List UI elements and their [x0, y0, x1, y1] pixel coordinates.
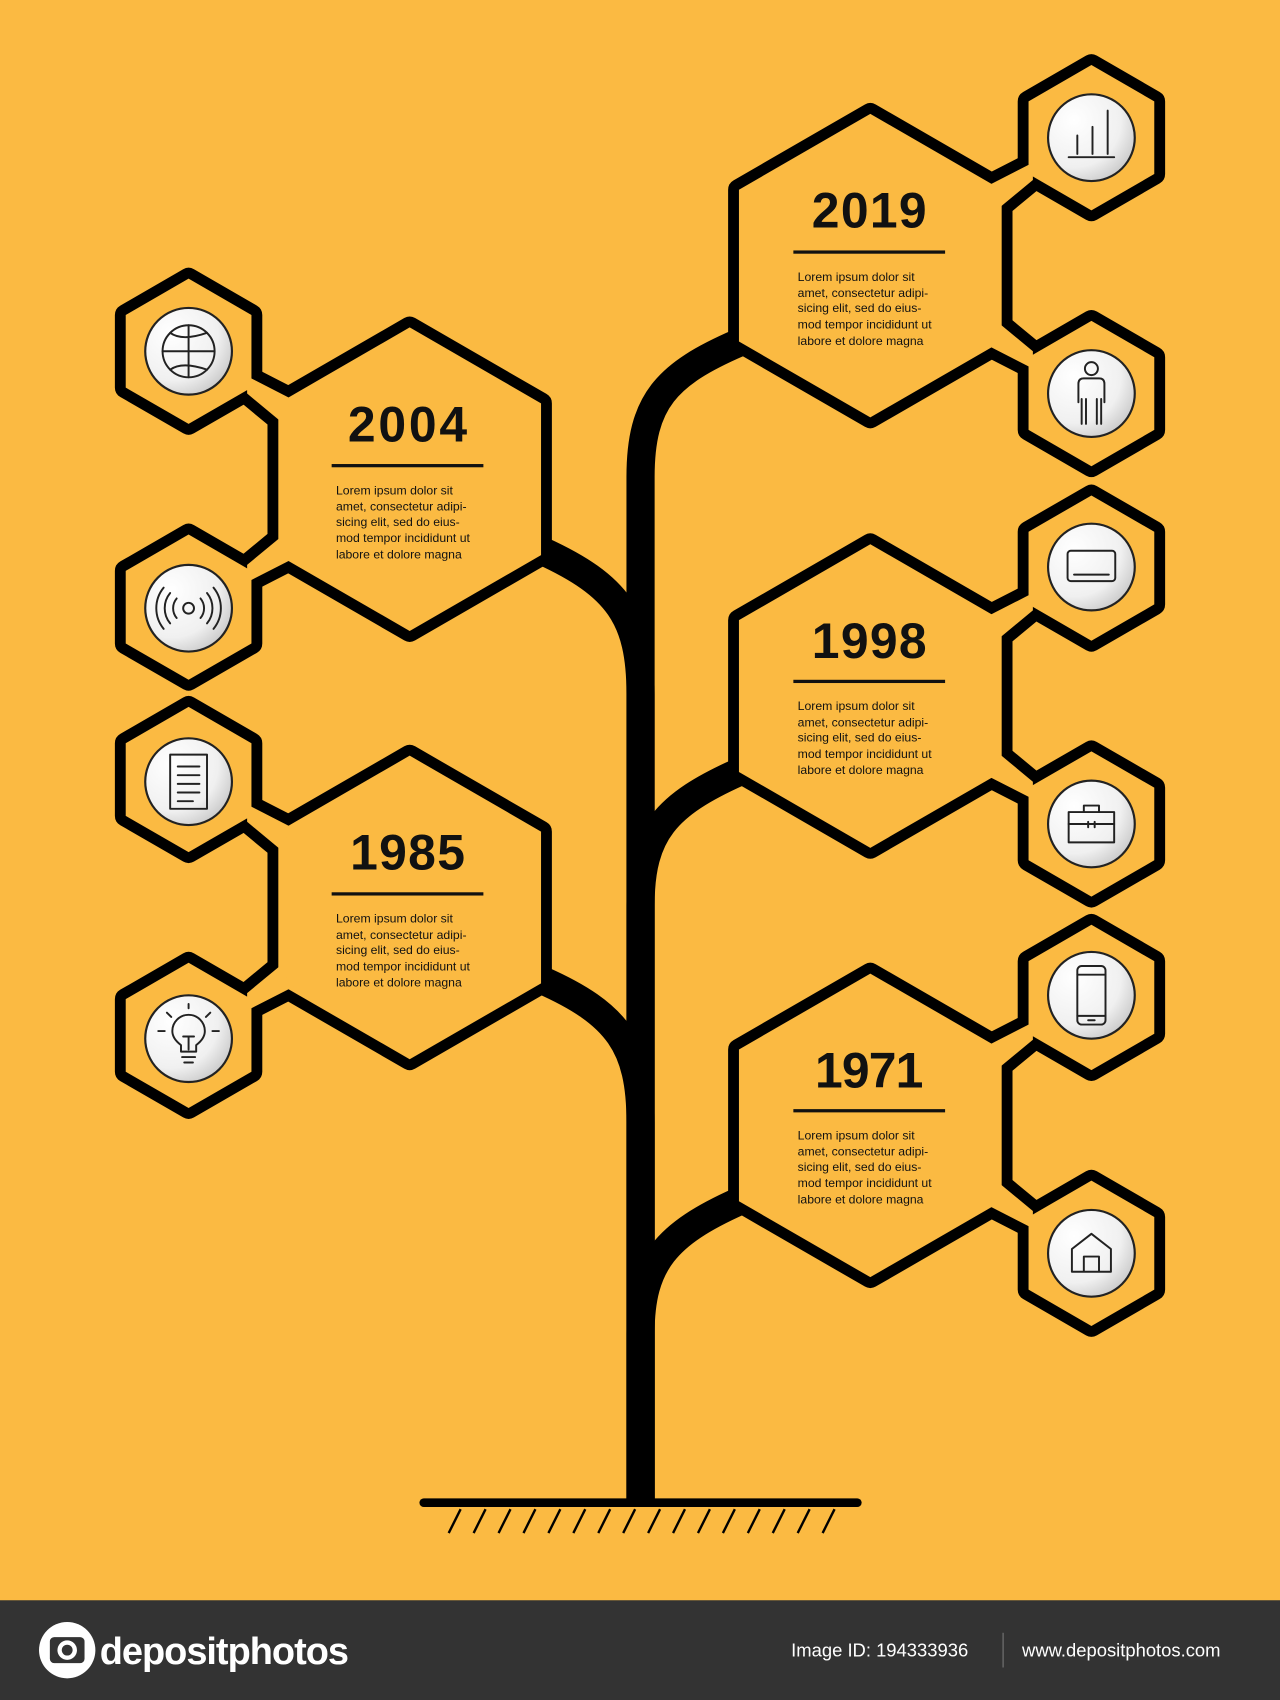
panel: 1971: 1971	[815, 1042, 923, 1098]
panel: 1985: 1985	[350, 825, 465, 881]
logo	[39, 1622, 349, 1678]
panel: 2019: sicing elit, sed do eius-	[798, 301, 921, 315]
image id: Image ID: 194333936	[791, 1640, 968, 1661]
panel: 1971: Lorem ipsum dolor sit	[798, 1128, 915, 1142]
panel: 1971: sicing elit, sed do eius-	[798, 1160, 921, 1174]
panel: 2004: Lorem ipsum dolor sit	[336, 483, 454, 497]
panel: 1985: Lorem ipsum dolor sit	[336, 912, 454, 926]
panel: 1985: labore et dolore magna	[336, 976, 462, 990]
panel: 1971: mod tempor incididunt ut	[798, 1176, 932, 1190]
panel: 2004: sicing elit, sed do eius-	[336, 515, 460, 529]
panel: 1971: labore et dolore magna	[798, 1192, 924, 1206]
panel: 2004: 2004	[348, 396, 467, 452]
panel: 2004: mod tempor incididunt ut	[336, 531, 471, 545]
panel: 2019: Lorem ipsum dolor sit	[798, 270, 915, 284]
icon: person	[1048, 350, 1135, 437]
panel: 1985: mod tempor incididunt ut	[336, 959, 471, 973]
panel: 1998: amet, consectetur adipi-	[798, 715, 928, 729]
icon: monitor	[1048, 524, 1135, 610]
footer bar	[0, 1600, 1280, 1700]
panel: 1998: labore et dolore magna	[798, 763, 924, 777]
panel: 1985	[332, 825, 483, 990]
panel: 1998: 1998	[812, 613, 927, 669]
panel: 1971: amet, consectetur adipi-	[798, 1145, 928, 1159]
panel: 1985: amet, consectetur adipi-	[336, 928, 467, 942]
icon: document	[145, 738, 232, 825]
icon: phone	[1048, 952, 1135, 1039]
panel: 1998: Lorem ipsum dolor sit	[798, 699, 915, 713]
panel: 2019: labore et dolore magna	[798, 334, 924, 348]
panel: 2004	[332, 396, 483, 561]
ground	[424, 1503, 857, 1533]
panel: 2004: amet, consectetur adipi-	[336, 500, 467, 514]
panel: 2019	[793, 183, 945, 348]
icon: signal waves	[145, 565, 232, 652]
panel: 2019: mod tempor incididunt ut	[798, 318, 932, 332]
panel: 1998	[793, 613, 945, 777]
panel: 2019: amet, consectetur adipi-	[798, 286, 928, 300]
icon: bar chart	[1048, 94, 1135, 181]
panel: 2004: labore et dolore magna	[336, 547, 462, 561]
panel: 1998: mod tempor incididunt ut	[798, 747, 932, 761]
icon: lightbulb	[145, 995, 232, 1082]
panel: 1971	[793, 1042, 945, 1206]
logo: depositphotos	[100, 1631, 349, 1673]
icon: basketball	[145, 308, 232, 395]
icon: house	[1048, 1210, 1135, 1297]
panel: 1985: sicing elit, sed do eius-	[336, 943, 460, 957]
tree trunk	[542, 343, 739, 1503]
icon: briefcase	[1048, 781, 1135, 867]
panel: 1998: sicing elit, sed do eius-	[798, 731, 921, 745]
node shapes outline	[126, 65, 1154, 1326]
panel: 2019: 2019	[812, 183, 927, 239]
url: www.depositphotos.com	[1021, 1640, 1221, 1661]
